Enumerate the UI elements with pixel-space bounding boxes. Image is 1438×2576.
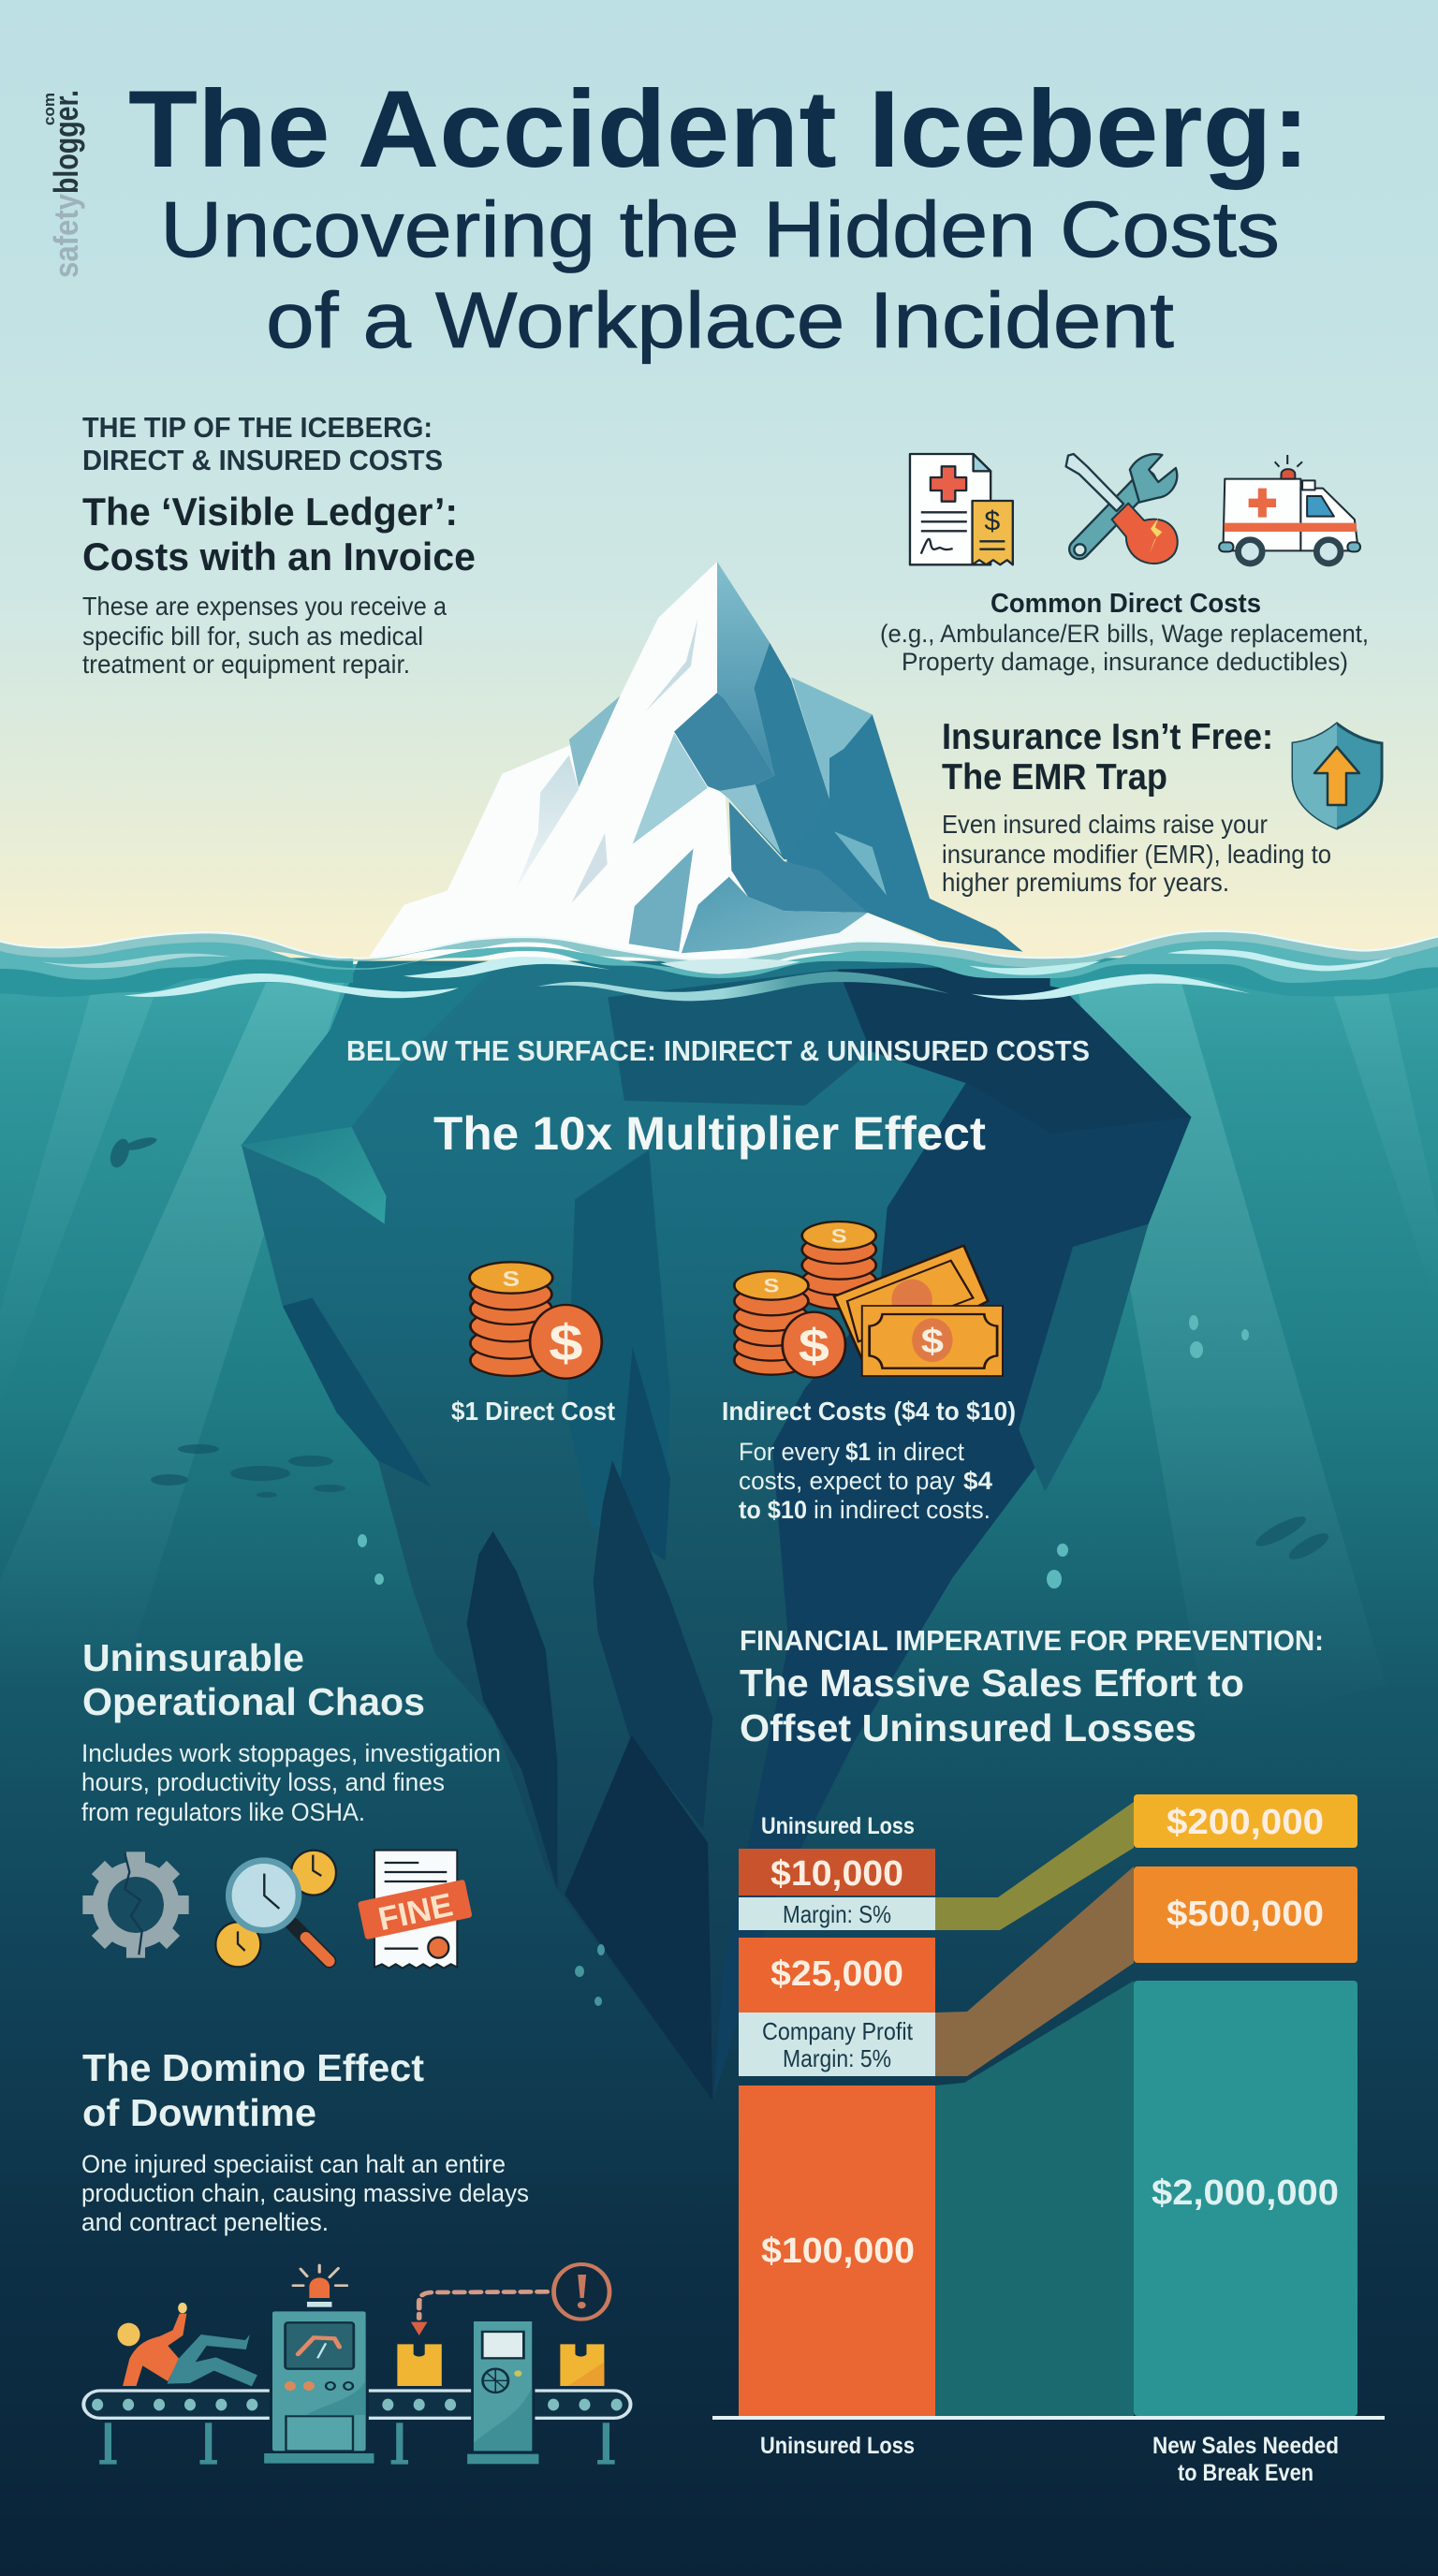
connector area [935,1981,1134,2416]
connector: $25,000 to $500,000 [935,1866,1134,2076]
chart heading [740,1624,1324,1749]
bar: $100,000: $100,000 [761,2232,915,2271]
bar: $10,000 [739,1849,935,1895]
company profit margin box: Margin: 5% [783,2044,891,2072]
text: common direct costs: Property damage, insurance deductibles) [902,648,1348,676]
panel: the EMR trap: Even insured claims raise your [942,810,1268,839]
bar: $25,000: $25,000 [770,1954,903,1994]
text: common direct costs: (e.g., Ambulance/ER bills, Wage replacement, [880,620,1369,648]
company profit margin box [739,2012,935,2076]
text: multiplier captions: costs, expect to pay [739,1467,955,1495]
heading: the 10x multiplier effect: The 10x Multiplier Effect [433,1107,986,1160]
icon: medical bill and receipt [910,454,1013,564]
chart heading: Offset Uninsured Losses [740,1706,1196,1749]
title: The Accident Iceberg: [128,67,1310,190]
margin box [739,1897,935,1930]
panel: the domino effect of downtime: and contract penelties. [81,2208,329,2236]
panel: uninsurable operational chaos: Operational Chaos [82,1680,425,1723]
panel: the EMR trap: higher premiums for years. [942,868,1229,897]
icon: single coin stack: S [503,1267,520,1291]
panel: uninsurable operational chaos: Includes work stoppages, investigation [81,1739,501,1767]
panel: the EMR trap: insurance modifier (EMR), leading to [942,840,1331,869]
icon: coin stacks and bills: $ [799,1319,829,1372]
text: multiplier captions: to $10 [739,1496,807,1524]
bar: $200,000: $200,000 [1167,1803,1324,1842]
panel: uninsurable operational chaos: hours, productivity loss, and fines [81,1768,445,1796]
panel: direct and insured costs: Costs with an Invoice [82,534,476,578]
axis labels: New Sales Needed [1152,2433,1339,2459]
panel: uninsurable operational chaos: Uninsurable [82,1636,304,1679]
icon: single coin stack: $ [549,1313,583,1371]
text: multiplier captions: Indirect Costs ($4 to $10) [722,1397,1016,1426]
icon: coin stacks and bills: $ [921,1322,944,1360]
icon: medical bill and receipt: $ [984,506,1001,537]
heading: below the surface: BELOW THE SURFACE: INDIRECT & UNINSURED COSTS [346,1034,1090,1067]
panel: the domino effect of downtime: The Domino Effect [82,2046,424,2089]
watermark: safetyblogger.com [40,90,85,278]
connector: $10,000 to $200,000 [935,1802,1134,1930]
company profit margin box: Company Profit [762,2017,914,2045]
background: sky [0,0,1438,992]
watermark: safetyblogger.com: com [40,93,58,125]
chart: sales effort to offset uninsured losses [712,1624,1385,2486]
title [128,67,1310,364]
panel: direct and insured costs: treatment or equipment repair. [82,650,410,679]
panel: the domino effect of downtime: One injured speciaiist can halt an entire [81,2150,506,2178]
watermark: safetyblogger.com: blogger. [47,90,85,194]
axis labels: to Break Even [1178,2460,1313,2486]
water surface wave bands [0,929,1438,1001]
title: Uncovering the Hidden Costs [160,185,1280,273]
icon: fine document: FINE [375,1886,456,1938]
panel: the domino effect of downtime: of Downtime [82,2091,316,2134]
bar: $200,000 [1134,1794,1357,1848]
icon: broken gear [82,1852,189,1958]
chart heading: FINANCIAL IMPERATIVE FOR PREVENTION: [740,1624,1324,1657]
icon: ambulance [1219,455,1360,564]
panel: the domino effect of downtime: production chain, causing massive delays [81,2179,529,2207]
fish silhouettes [107,1135,1332,1564]
bar: $100,000 [739,2086,935,2416]
panel: direct and insured costs: THE TIP OF THE ICEBERG: [82,411,433,444]
bar: $10,000: $10,000 [770,1854,903,1894]
panel: uninsurable operational chaos: from regulators like OSHA. [81,1798,365,1826]
icon: broken tools [1066,454,1178,564]
icon: coin stacks and bills: S [831,1224,847,1247]
text: multiplier captions: in direct [877,1438,964,1466]
panel: the EMR trap: Insurance Isn’t Free: [942,717,1273,757]
text: multiplier captions: $4 [963,1467,992,1495]
margin box: Margin: S% [783,1900,891,1928]
panel: uninsurable operational chaos [81,1636,501,1826]
bar: $500,000: $500,000 [1167,1895,1324,1934]
panel: direct and insured costs: These are expenses you receive a [82,592,447,621]
bar: $25,000 [739,1938,935,2012]
text: multiplier captions: For every [739,1438,840,1466]
panel: direct and insured costs: DIRECT & INSURED COSTS [82,444,443,476]
icon: shield with up arrow [1293,724,1382,828]
panel: the EMR trap: The EMR Trap [942,757,1167,798]
bubbles [358,1315,1249,2006]
column label top: Uninsured Loss [761,1813,915,1839]
panel: direct and insured costs: The ‘Visible Ledger’: [82,490,458,534]
axis labels: Uninsured Loss [760,2433,915,2459]
panel: the EMR trap [942,717,1331,897]
bar: $500,000 [1134,1866,1357,1963]
axis labels [760,2433,1339,2486]
panel: direct and insured costs: specific bill for, such as medical [82,622,423,651]
icon: single coin stack [470,1262,602,1379]
chart heading: The Massive Sales Effort to [740,1661,1244,1705]
illustration: conveyor line halted by injury [83,2264,631,2465]
text: multiplier captions: $1 [845,1438,871,1466]
text: common direct costs [880,589,1369,676]
icon: coin stacks and bills: S [763,1275,779,1296]
icon: coin stacks and bills [734,1222,1003,1378]
panel: direct and insured costs [82,411,476,679]
icon: magnifier with clocks [215,1851,336,1967]
watermark: safetyblogger.com: safety [47,194,85,278]
light rays [0,983,1438,1732]
text: multiplier captions [451,1397,1016,1524]
ocean water [0,964,1438,2576]
wave streaks [41,949,1393,1001]
panel: the domino effect of downtime [81,2046,529,2236]
icon: fine document [358,1851,473,1969]
iceberg above the water [369,562,1023,964]
iceberg below the water [240,961,1191,2101]
text: multiplier captions: $1 Direct Cost [451,1397,615,1426]
title: of a Workplace Incident [266,276,1174,364]
text: multiplier captions: in indirect costs. [814,1496,990,1524]
chart axis [712,2416,1385,2420]
text: common direct costs: Common Direct Costs [990,589,1261,619]
bar: $2,000,000: $2,000,000 [1152,2174,1339,2213]
bar: $2,000,000 [1134,1981,1357,2416]
